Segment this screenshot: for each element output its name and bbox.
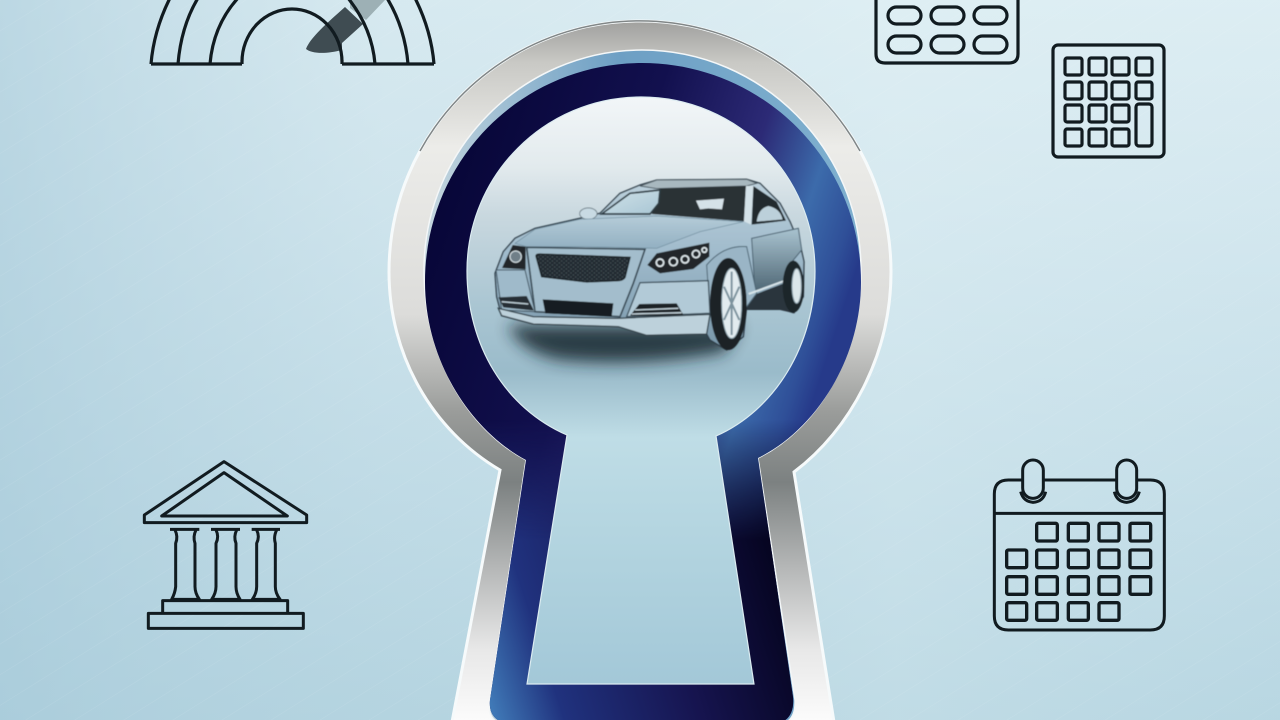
calendar day squares [1007, 523, 1151, 620]
icon: wall calendar [994, 460, 1164, 630]
icon: grid calendar [1053, 45, 1164, 157]
icon: top calendar [876, 0, 1018, 63]
calendar frame [876, 0, 1018, 63]
right fog lamp [630, 303, 684, 316]
keyhole blue ring [425, 63, 861, 720]
windshield light reflection [602, 190, 660, 214]
keyhole opening view [467, 97, 815, 684]
calendar rings [1021, 460, 1139, 502]
sill highlight [749, 281, 785, 294]
keyhole [389, 21, 891, 720]
underbody [745, 282, 795, 313]
gauge arcs [151, 9, 434, 64]
interior seat highlight [696, 199, 724, 209]
car [495, 179, 804, 350]
front splitter [498, 308, 710, 335]
front rim [722, 268, 742, 338]
keyhole bevel highlight [424, 50, 861, 720]
icon: bank building [144, 462, 307, 628]
hood [515, 216, 743, 248]
bumper right panel [627, 281, 710, 317]
gauge needle handle [350, 0, 385, 20]
bumper left panel [496, 270, 535, 312]
right headlight lenses [656, 248, 707, 266]
right mirror [757, 206, 783, 222]
calendar header line [994, 509, 1164, 518]
bank columns [170, 529, 280, 599]
windshield dark [652, 186, 746, 221]
bank pediment [162, 473, 287, 516]
icon: speedometer gauge [151, 0, 434, 64]
grid cells [1065, 58, 1152, 146]
bank roof [144, 462, 307, 523]
calendar pills [888, 7, 1007, 53]
car shadow [508, 325, 740, 363]
fender [707, 247, 757, 313]
keyhole silver outer frame [389, 21, 891, 720]
calendar body [994, 480, 1164, 630]
rear rim [792, 269, 801, 303]
left headlight lens [510, 251, 521, 262]
door panel [752, 228, 802, 292]
left fog lamp [498, 296, 534, 311]
gauge needle [306, 7, 363, 53]
bank steps [148, 601, 303, 628]
left fog highlights [502, 302, 528, 304]
silver rim shading [420, 21, 860, 151]
rear wheel [783, 261, 804, 313]
front wheel [710, 258, 747, 350]
left headlight [502, 245, 526, 269]
front rim spokes [724, 272, 739, 335]
side window [752, 186, 786, 225]
grid frame [1053, 45, 1164, 157]
side window pillar [744, 186, 753, 225]
right fog stripes [632, 308, 682, 314]
car body [495, 179, 804, 350]
lower grille [543, 299, 613, 317]
front fascia [527, 247, 645, 317]
grille [536, 254, 630, 282]
roof [640, 179, 757, 189]
left mirror [580, 208, 597, 219]
right headlight [647, 243, 709, 273]
